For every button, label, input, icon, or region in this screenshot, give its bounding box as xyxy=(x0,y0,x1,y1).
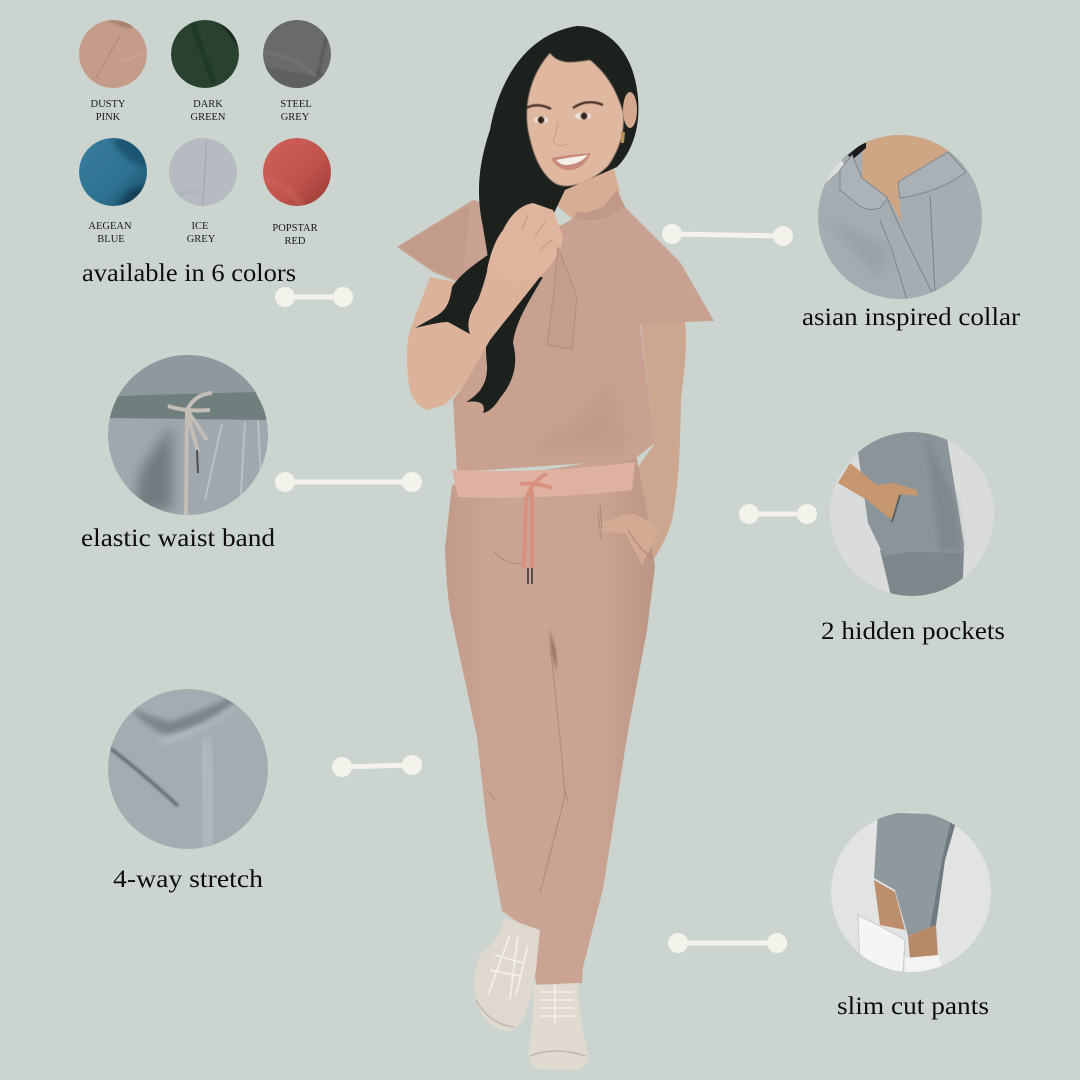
collar stand left xyxy=(840,155,888,209)
drawstring xyxy=(520,474,552,584)
detail: elastic waist band xyxy=(108,355,268,515)
connector: collar xyxy=(662,224,793,246)
detail: slim cut pants xyxy=(831,812,991,975)
connector: colors xyxy=(275,287,353,307)
pleats xyxy=(205,420,262,510)
ankle xyxy=(874,880,905,930)
swatch label: dusty pink: DUSTY xyxy=(90,99,126,110)
wrinkles xyxy=(130,695,235,735)
swatch label: aegean blue: AEGEAN xyxy=(88,221,132,232)
hand finger lines xyxy=(522,215,552,250)
face xyxy=(527,53,624,186)
ear xyxy=(623,92,637,128)
sneaker left xyxy=(858,915,905,972)
left arm xyxy=(407,270,540,410)
skin at neck xyxy=(862,130,948,222)
top xyxy=(397,190,714,472)
collar xyxy=(574,190,625,220)
collar stand right xyxy=(898,152,966,198)
fold shading xyxy=(841,230,887,271)
swatch: ice grey xyxy=(169,138,237,206)
swatch label: aegean blue: BLUE xyxy=(97,234,125,245)
connector: pockets xyxy=(739,504,817,524)
waistband xyxy=(452,462,635,498)
placket seams xyxy=(880,196,935,300)
eyes xyxy=(534,112,591,124)
shirt hem xyxy=(118,355,258,395)
figure: model in dusty pink scrubs xyxy=(397,26,714,1070)
trouser leg xyxy=(874,812,958,936)
connector: slim pants xyxy=(668,933,787,953)
arm xyxy=(838,463,917,520)
hand in pocket xyxy=(600,514,660,565)
sleeve fold xyxy=(400,205,470,280)
panel: colour swatches xyxy=(79,20,332,247)
right shoe xyxy=(528,983,588,1070)
neck xyxy=(556,165,620,226)
nose xyxy=(553,122,567,146)
heading: available in 6 colors: available in 6 colors xyxy=(82,260,296,287)
swatch: popstar red xyxy=(263,138,331,208)
swatch label: ice grey: GREY xyxy=(187,234,216,245)
connector: waist band xyxy=(275,472,422,492)
leg fold lines xyxy=(487,510,601,893)
swatch: aegean blue xyxy=(79,136,148,206)
label: 4-way stretch: 4-way stretch xyxy=(113,866,264,893)
swatch label: popstar red: RED xyxy=(284,236,306,247)
label: asian inspired collar: asian inspired collar xyxy=(802,304,1021,331)
shirt xyxy=(858,430,964,556)
top shading xyxy=(530,385,625,450)
label: 2 hidden pockets: 2 hidden pockets xyxy=(821,618,1005,645)
connector: stretch xyxy=(332,755,422,777)
trousers xyxy=(880,550,964,600)
hair lower strands xyxy=(466,277,543,413)
detail: 4-way stretch xyxy=(108,689,268,849)
eyebrows xyxy=(526,102,603,109)
sneaker right xyxy=(905,955,942,972)
right arm xyxy=(624,320,686,566)
hair on head xyxy=(479,26,638,270)
band xyxy=(108,392,270,420)
background corner xyxy=(826,160,844,183)
detail: 2 hidden pockets xyxy=(830,430,994,600)
placket xyxy=(547,247,577,349)
swatch label: steel grey: GREY xyxy=(281,112,310,123)
pocket line xyxy=(600,505,652,558)
smile xyxy=(551,153,591,170)
left shoe xyxy=(474,918,540,1031)
swatch label: ice grey: ICE xyxy=(192,221,208,232)
side stripe xyxy=(930,822,955,928)
shadows xyxy=(135,425,172,510)
swatch label: popstar red: POPSTAR xyxy=(272,223,318,234)
hair wisp over arm xyxy=(415,252,492,334)
side fold xyxy=(929,450,965,550)
label: elastic waist band: elastic waist band xyxy=(81,525,276,552)
swatch: dark green xyxy=(171,20,242,88)
pocket opening xyxy=(892,495,900,522)
dark hair corner xyxy=(848,142,866,158)
swatch label: dark green: GREEN xyxy=(190,112,226,123)
hand at hair xyxy=(487,203,563,281)
earring xyxy=(621,132,625,143)
swatch label: steel grey: STEEL xyxy=(280,99,312,110)
swatch label: dark green: DARK xyxy=(193,99,223,110)
detail: asian inspired collar xyxy=(815,130,985,305)
swatch label: dusty pink: PINK xyxy=(96,112,121,123)
swatch: dusty pink xyxy=(79,20,147,88)
drawstring xyxy=(168,393,212,515)
crotch crease xyxy=(549,628,557,672)
swatch: steel grey xyxy=(262,20,332,90)
pants xyxy=(445,455,655,985)
ankle right xyxy=(908,925,938,958)
label: slim cut pants: slim cut pants xyxy=(837,993,989,1020)
